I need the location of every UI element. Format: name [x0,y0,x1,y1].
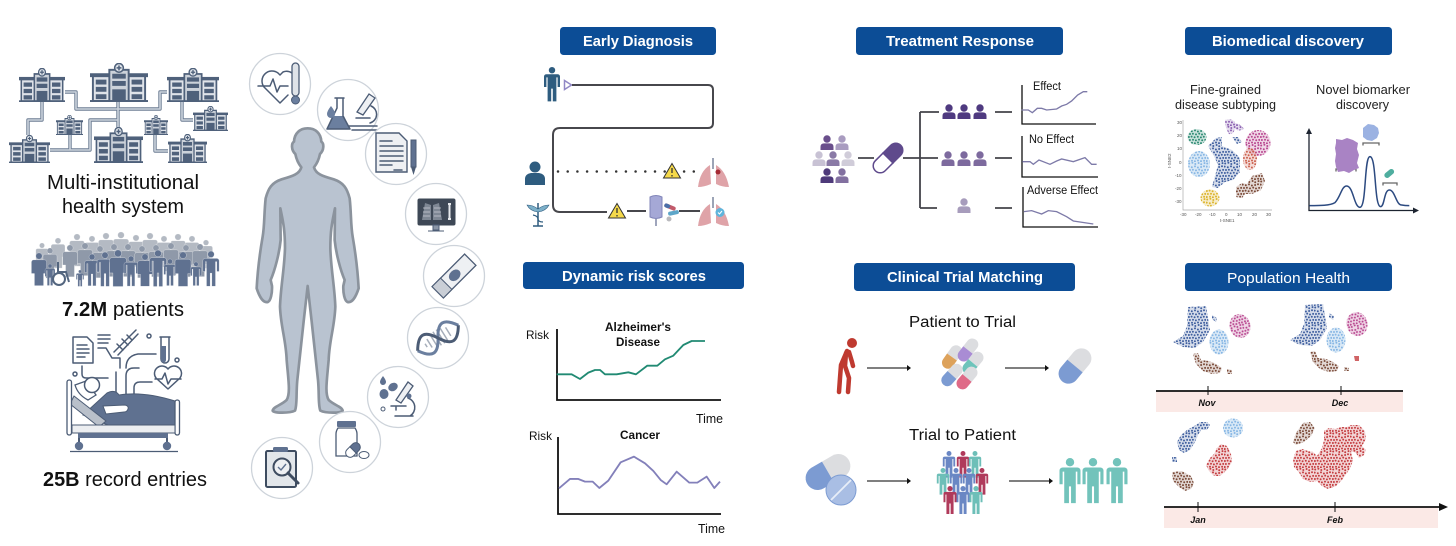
heading: treatment response [856,27,1063,55]
icon: caduceus [527,203,549,226]
arrow: drug to cohort [867,478,911,484]
icon: timeline start marker [564,80,572,90]
panel: biomedical discovery [1167,27,1419,223]
dotted no-detection line [558,170,695,173]
icon: selected capsule [1054,344,1096,388]
subheading: novel biomarker discovery: discovery [1336,98,1390,112]
icon: blood cells and microscope [368,366,428,428]
chart: effect: Effect [1033,81,1062,93]
diagnostic pathway line [553,85,713,212]
panel: treatment response [812,27,1099,227]
heading: clinical trial matching [854,263,1075,291]
chart: cancer risk: Time [698,522,725,536]
chart: Alzheimer's disease risk: Disease [616,335,660,349]
chart: t-SNE scatter of subtypes: 0 [1225,212,1228,217]
icon: drug capsule [870,140,906,176]
icon: patient in pain [839,338,857,392]
subheading: fine-grained disease subtyping: disease subtyping [1175,98,1276,112]
panel: early diagnosis [525,27,729,226]
icon: medication bottle and pills [320,412,380,472]
icon: healthy lung with check [698,197,729,226]
icon: responders [942,104,986,119]
subheading: novel biomarker discovery: Novel biomarker [1316,83,1410,97]
icon: x-ray monitor [406,184,466,244]
subheading: trial to patient: Trial to Patient [909,427,1017,444]
branching connector lines [858,112,1012,208]
icon: diverse cohort [937,451,988,514]
timeline: November to December: Nov [1198,398,1216,408]
timeline: November to December: Dec [1332,398,1348,408]
chart: t-SNE scatter of subtypes: 30 [1177,120,1183,125]
chart: adverse effect [1023,185,1099,227]
icon: mixed patient group [812,135,854,183]
subheading: novel biomarker discovery [1316,83,1410,112]
timeline: January to February [1164,502,1448,528]
heading: multi-institutional health system: Multi-institutional [47,172,199,194]
heading: biomedical discovery [1185,27,1392,55]
icon: clinical note and pen [366,124,426,184]
chart: t-SNE scatter of subtypes: 10 [1237,212,1243,217]
heading: early diagnosis: Early Diagnosis [583,33,693,50]
chart: t-SNE scatter of subtypes: -10 [1209,212,1216,217]
chart: biomarker peaks [1306,124,1419,214]
icon: patient in bed with data [67,330,182,452]
chart: t-SNE scatter of subtypes: -20 [1175,186,1182,191]
icon: network of hospitals [9,63,228,163]
chart: no effect [1022,134,1098,177]
heading: clinical trial matching: Clinical Trial Matching [887,269,1043,286]
chart: Alzheimer's disease risk [526,320,723,426]
figure: human body silhouette [257,128,359,413]
icon: pathology slide [424,246,484,306]
icon: warning sign lower [608,204,626,218]
chart: t-SNE scatter of subtypes: -30 [1180,212,1187,217]
icon: DNA helix [408,308,468,368]
chart: adverse effect: Adverse Effect [1027,185,1099,197]
stat: patients: 7.2M patients [62,299,184,321]
chart: t-SNE scatter of subtypes: t-SNE2 [1167,153,1172,168]
chart: February clusters [1293,422,1366,489]
chart: t-SNE scatter of subtypes [1167,119,1272,223]
arrow: drugs to selected [1005,365,1049,371]
icon: lab flask and microscope [318,80,378,140]
chart: cancer risk: Cancer [620,428,660,442]
heading: dynamic risk scores [523,262,744,289]
heading: early diagnosis [560,27,716,55]
chart: December clusters [1290,304,1370,372]
icon: doctor [525,162,545,185]
chart: t-SNE scatter of subtypes: -10 [1175,173,1182,178]
panel: dynamic risk scores [523,262,744,536]
heading: population health: Population Health [1227,270,1350,287]
chart: t-SNE scatter of subtypes: 30 [1266,212,1272,217]
heading: treatment response: Treatment Response [886,33,1034,50]
chart: t-SNE scatter of subtypes: 20 [1252,212,1258,217]
icon: adverse patient [958,198,970,213]
icon: wheelchair [53,262,69,285]
icon: capsule and tablet [801,450,856,505]
chart: Alzheimer's disease risk: Alzheimer's [605,320,671,334]
panel: clinical trial matching [801,263,1128,514]
icon: pile of capsules [939,336,986,392]
chart: January clusters [1172,418,1243,491]
chart: November clusters [1173,306,1253,374]
icon: vitals heart and thermometer [250,54,310,114]
timeline: November to December [1156,386,1403,412]
stat: record entries: 25B record entries [43,469,207,491]
chart: t-SNE scatter of subtypes: -20 [1195,212,1202,217]
subheading: patient to trial: Patient to Trial [909,314,1016,331]
chart: t-SNE scatter of subtypes: 20 [1177,133,1183,138]
timeline: January to February: Feb [1327,515,1343,525]
heading: multi-institutional health system: health system [62,196,184,218]
chart: t-SNE scatter of subtypes: t-SNE1 [1220,218,1235,223]
panel: human body with data modalities [250,54,484,498]
panel: health system data sources [9,63,228,491]
icon: non-responders [942,151,986,166]
icon: IV bag and pills [650,196,679,226]
icon: patient figure [544,67,560,101]
chart: cancer risk [529,428,725,536]
chart: t-SNE scatter of subtypes: 10 [1177,146,1183,151]
heading: population health [1185,263,1392,291]
icon: crowd of patients [31,232,219,287]
heading: biomedical discovery: Biomedical discovery [1212,33,1365,50]
timeline: January to February: Jan [1190,515,1206,525]
chart: cancer risk: Risk [529,429,553,443]
chart: no effect: No Effect [1029,134,1075,146]
subheading: fine-grained disease subtyping [1175,83,1276,112]
heading: dynamic risk scores: Dynamic risk scores [562,268,706,285]
arrow: cohort to patients [1009,478,1053,484]
chart: Alzheimer's disease risk: Risk [526,328,550,342]
arrow: patient to drugs [867,365,911,371]
chart: effect [1022,81,1096,124]
icon: matched patients [1060,458,1128,503]
icon: clipboard with magnifier [252,438,312,498]
icon: lung with tumour [698,158,729,187]
chart: t-SNE scatter of subtypes: -30 [1175,199,1182,204]
subheading: fine-grained disease subtyping: Fine-grained [1190,83,1261,97]
panel: population health [1156,263,1448,528]
icon: warning sign upper [664,164,680,178]
chart: Alzheimer's disease risk: Time [696,412,723,426]
chart: t-SNE scatter of subtypes: 0 [1179,160,1182,165]
heading: multi-institutional health system [47,172,199,218]
